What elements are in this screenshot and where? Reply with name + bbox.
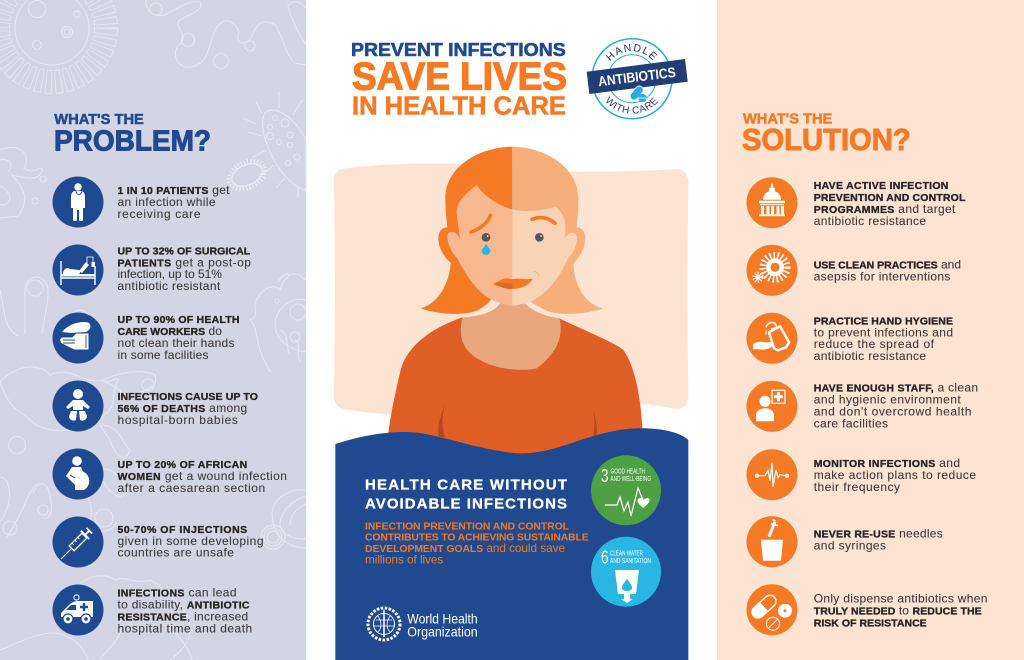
heading: what's the problem: PROBLEM? (54, 126, 211, 158)
text: sustainable development goals: DEVELOPMENT GOALS and could save (365, 541, 565, 555)
text: RESISTANCE, increased (118, 610, 248, 624)
badge: SDG 3 (591, 455, 661, 525)
stamp: handle antibiotics with care (586, 38, 688, 120)
solution item: infection programmes (746, 177, 966, 228)
stamp: handle antibiotics with care: WITH CARE (606, 96, 658, 114)
hair right (512, 147, 603, 314)
logo: World Health Organization (368, 608, 478, 640)
heading: what's the solution: WHAT'S THE (743, 112, 833, 128)
badge: SDG 6: CLEAN WATER (610, 548, 643, 558)
text (814, 380, 978, 430)
icon: pulse line (746, 449, 798, 500)
text: 56% OF DEATHS among (118, 401, 247, 415)
title: SAVE LIVES (352, 55, 567, 98)
face left (447, 185, 512, 306)
eyes (482, 233, 544, 242)
text: and syringes (814, 539, 886, 553)
title (351, 39, 567, 121)
text (118, 183, 230, 221)
text (118, 459, 287, 495)
title: IN HEALTH CARE (352, 93, 566, 121)
icon: hospital bed (52, 244, 104, 296)
text: and hygienic environment (814, 392, 961, 406)
text (118, 524, 264, 560)
text: to disability, ANTIBIOTIC (118, 598, 250, 612)
text: TRULY NEEDED to REDUCE THE (814, 603, 982, 617)
text: care facilities (814, 416, 888, 430)
text: INFECTIONS can lead (118, 586, 236, 600)
solution item: never re-use needles (746, 516, 943, 567)
text: UP TO 20% OF AFRICAN (118, 459, 247, 471)
text: HAVE ENOUGH STAFF, a clean (814, 380, 978, 394)
text: sustainable development goals: INFECTION PREVENTION AND CONTROL (365, 521, 570, 532)
heading: health care without avoidable infections: AVOIDABLE INFECTIONS (365, 495, 567, 512)
icon: pills (746, 584, 798, 635)
text (118, 314, 240, 362)
text: to prevent infections and (814, 325, 953, 339)
text: antibiotic resistant (118, 279, 221, 293)
text: an infection while (118, 195, 216, 209)
badge: SDG 3: GOOD HEALTH (610, 466, 645, 476)
hair left (421, 147, 512, 314)
pillow (334, 164, 688, 414)
blanket (335, 428, 688, 660)
text (814, 315, 953, 363)
text (814, 180, 966, 228)
text: PROGRAMMES and target (814, 202, 956, 216)
stamp: handle antibiotics with care: HANDLE (606, 44, 658, 61)
text: asepsis for interventions (814, 269, 950, 283)
text: reduce the spread of (814, 337, 935, 351)
eyebrows (471, 215, 555, 232)
text: hospital time and death (118, 622, 252, 636)
solution item: dispense antibiotics (746, 584, 987, 635)
heading: health care without avoidable infections (365, 476, 567, 512)
text (814, 258, 961, 283)
icon: ambulance (52, 584, 104, 636)
solution item: hand hygiene (746, 313, 953, 364)
text: antibiotic resistance (814, 349, 926, 363)
text: UP TO 32% OF SURGICAL (118, 245, 251, 257)
text: receiving care (118, 207, 201, 221)
text: hospital-born babies (118, 413, 238, 427)
text: their frequency (814, 480, 900, 494)
icon: heartbeat (605, 488, 643, 516)
problem item: consequences (52, 584, 252, 636)
problem item: 1 in 10 patients (52, 176, 230, 228)
heading: health care without avoidable infections: HEALTH CARE WITHOUT (365, 476, 567, 494)
icon: WHO emblem (368, 608, 400, 640)
icon: staff and medical sign (746, 381, 798, 432)
text: antibiotic resistance (814, 214, 926, 228)
text: 1 IN 10 PATIENTS get (118, 183, 230, 197)
sweater (388, 317, 643, 460)
background microbe pattern (0, 0, 306, 660)
text: Only dispense antibiotics when (814, 591, 987, 605)
text: UP TO 90% OF HEALTH (118, 314, 240, 326)
icon: government building (746, 177, 798, 228)
text: NEVER RE-USE needles (814, 527, 943, 541)
stamp: handle antibiotics with care: ANTIBIOTICS (597, 64, 677, 89)
icon: hand and soap (746, 313, 798, 364)
text: sustainable development goals: CONTRIBUTES TO ACHIEVING SUSTAINABLE (365, 533, 589, 544)
badge: SDG 6: AND SANITATION (610, 556, 651, 565)
problem item: african women (52, 448, 287, 500)
text: CARE WORKERS do (118, 324, 222, 338)
logo: World Health Organization: Organization (407, 623, 478, 639)
problem item: surgical patients (52, 244, 251, 296)
text: sustainable development goals: millions of lives (365, 552, 443, 566)
text (814, 527, 943, 553)
icon: baby (52, 380, 104, 432)
face right (512, 207, 577, 306)
illustration: woman in bed (334, 147, 688, 660)
icon: germs (746, 245, 798, 296)
text: given in some developing (118, 534, 264, 548)
icon: syringe (52, 516, 104, 568)
icon: hands (52, 312, 104, 364)
solution item: monitor infections (746, 449, 976, 500)
icon: pills (628, 84, 647, 102)
badge: SDG 3: AND WELL-BEING (610, 474, 651, 483)
solution item: clean practices (746, 245, 961, 296)
text: and don't overcrowd health (814, 404, 971, 418)
text: 50-70% OF INJECTIONS (118, 524, 247, 536)
badge: SDG 6: 6 (601, 548, 608, 568)
panel: problem background (0, 0, 306, 660)
icon: pregnant woman (52, 448, 104, 500)
sweater folds (438, 404, 597, 437)
text: sustainable development goals (365, 521, 589, 566)
solution item: enough staff (746, 380, 978, 432)
text: RISK OF RESISTANCE (814, 617, 927, 629)
text: make action plans to reduce (814, 468, 976, 482)
text: WOMEN get a wound infection (118, 469, 287, 483)
text: in some facilities (118, 348, 208, 362)
problem item: health care workers (52, 312, 240, 364)
badge: SDG 3: 3 (601, 466, 608, 486)
text (118, 586, 252, 636)
text (814, 591, 987, 629)
text: countries are unsafe (118, 546, 234, 560)
title: PREVENT INFECTIONS (351, 39, 566, 60)
text: after a caesarean section (118, 481, 265, 495)
text (118, 391, 258, 427)
text (814, 456, 976, 494)
text: INFECTIONS CAUSE UP TO (118, 391, 258, 403)
logo: World Health Organization: World Health (407, 610, 478, 626)
text: PRACTICE HAND HYGIENE (814, 315, 953, 327)
text: USE CLEAN PRACTICES and (814, 258, 961, 272)
text (118, 245, 251, 293)
icon: cup with syringe (746, 516, 798, 567)
heading: what's the problem: WHAT'S THE (54, 112, 144, 128)
text: PREVENTION AND CONTROL (814, 192, 966, 204)
text: MONITOR INFECTIONS and (814, 456, 960, 470)
text: not clean their hands (118, 336, 234, 350)
icon: patient (52, 176, 104, 228)
badge: SDG 6 (591, 537, 661, 607)
panel: solution background (717, 0, 1024, 660)
problem item: hospital-born babies (52, 380, 258, 432)
neck (461, 303, 561, 370)
text: HAVE ACTIVE INFECTION (814, 180, 948, 192)
icon: water glass (615, 570, 639, 603)
heading: what's the solution: SOLUTION? (742, 122, 911, 157)
tear (482, 244, 490, 255)
text: infection, up to 51% (118, 267, 222, 281)
text: PATIENTS get a post-op (118, 255, 251, 269)
mouth (492, 271, 538, 289)
heading: what's the problem (54, 112, 211, 158)
problem item: unsafe injections (52, 516, 264, 568)
